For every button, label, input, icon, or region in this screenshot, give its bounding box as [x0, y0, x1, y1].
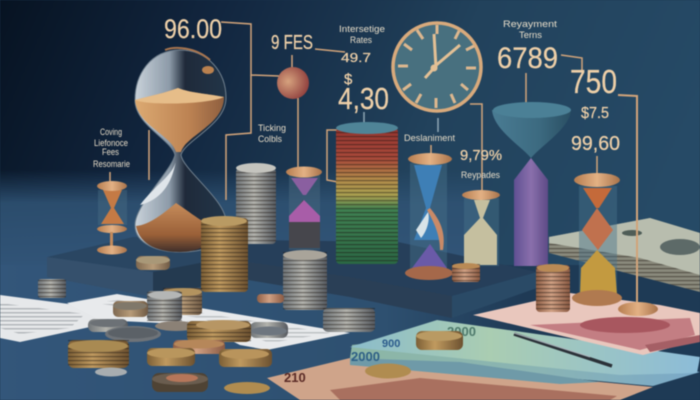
label: interest rates: Intersetige — [339, 24, 385, 34]
label: ticking coins: Colbls — [258, 134, 282, 144]
label: repayment terms — [503, 19, 558, 40]
connector lines — [110, 22, 637, 305]
label: coving fees: Fees — [102, 147, 119, 157]
label: repayment terms: Reyayment — [503, 19, 558, 29]
label: disclaimer: Deslaniment — [404, 133, 456, 143]
platform left — [47, 237, 225, 297]
value: 6789: 6789 — [497, 42, 558, 75]
beige hourglass — [462, 190, 500, 266]
note figure labels — [284, 324, 476, 385]
note figure labels: 2000 — [351, 349, 380, 364]
note figure labels: 210 — [284, 370, 306, 385]
value: 99,60: 99,60 — [571, 133, 620, 155]
note figure labels: 2000 — [447, 324, 476, 339]
value: dollar sign: $ — [344, 71, 353, 88]
purple hourglass — [286, 166, 322, 250]
value: 9 FES: 9 FES — [271, 32, 313, 54]
label: repayments: Reypades — [461, 170, 500, 180]
pen — [514, 333, 612, 366]
clock — [393, 23, 481, 111]
ball marker — [277, 67, 309, 99]
note figure labels: 900 — [382, 338, 400, 350]
value: 750: 750 — [570, 63, 617, 100]
funnel column — [492, 102, 571, 266]
orange and yellow hourglass — [572, 173, 622, 306]
coin stacks — [38, 216, 570, 394]
banknotes — [267, 293, 700, 400]
label: repayment terms: Terns — [519, 30, 543, 40]
wooden disc base — [618, 302, 658, 316]
platform right — [248, 240, 537, 318]
label: ticking coins: Ticking — [258, 123, 286, 133]
value: 96.00: 96.00 — [164, 14, 222, 44]
label: coving fees: Coving — [100, 127, 122, 137]
label: coving fees: Liefonoce — [94, 138, 128, 148]
value: 49.7: 49.7 — [341, 50, 371, 65]
value: 9,79%: 9,79% — [460, 147, 502, 164]
documents — [0, 294, 350, 350]
label: ticking coins — [258, 123, 286, 144]
money stack — [549, 218, 700, 292]
label: coving fees: Resomarie — [93, 159, 130, 169]
label: interest rates — [339, 24, 385, 45]
large hourglass — [135, 48, 226, 252]
label: interest rates: Rates — [350, 35, 372, 45]
value: 4,30: 4,30 — [338, 81, 389, 116]
value: $7.5: $7.5 — [581, 105, 609, 122]
table surface — [0, 170, 700, 400]
multicolour coin column — [336, 122, 398, 264]
small hourglass left — [97, 181, 127, 254]
silver stack rear — [236, 163, 276, 244]
blue hourglass — [405, 153, 453, 280]
label: coving fees — [93, 127, 130, 169]
